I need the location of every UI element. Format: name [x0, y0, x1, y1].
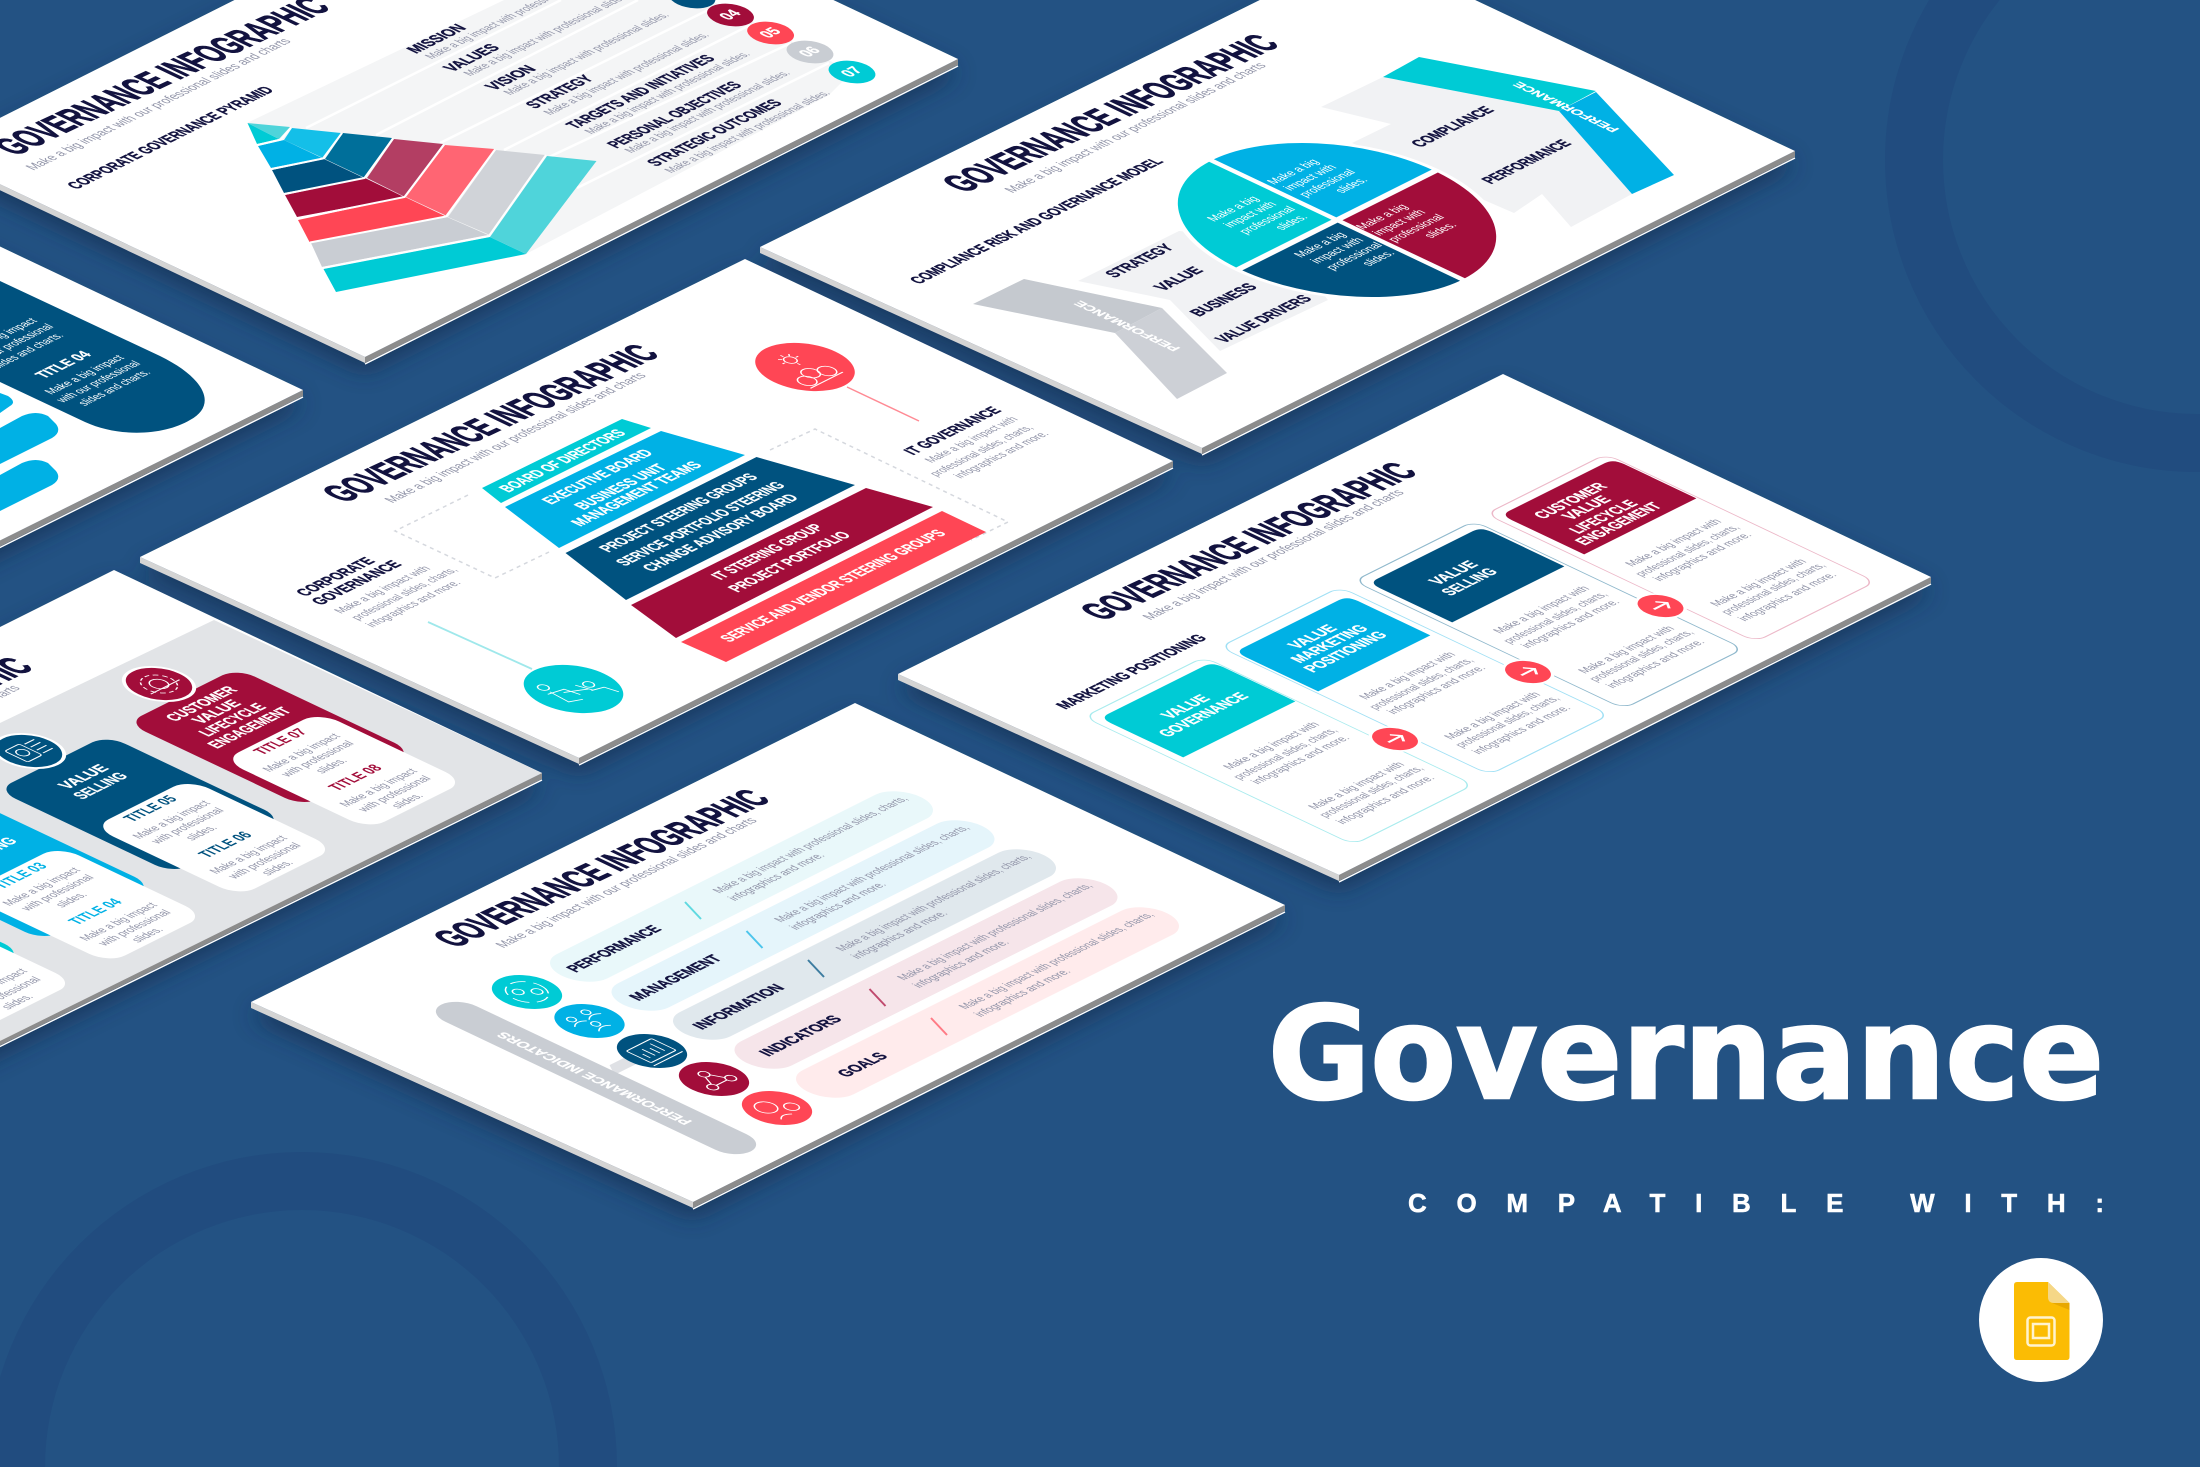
column: dark blue: Make a big impact	[130, 799, 214, 841]
icon: arrow one	[1358, 721, 1432, 757]
circle segment text: impact with	[1369, 207, 1429, 237]
text: IT governance: professional slides, charts,	[927, 424, 1037, 478]
icon: dark blue dashboard	[603, 1027, 701, 1075]
pyramid labels: MISSION	[403, 22, 471, 56]
row: management: infographics and more.	[787, 880, 890, 932]
slide subtitle: Make a big impact with our professional slides and charts	[21, 36, 295, 172]
card: value selling: SELLING	[1437, 566, 1503, 598]
slide title: GOVERNANCE INFOGRAPHIC	[1069, 457, 1427, 625]
icon: blue team	[540, 997, 639, 1045]
chart: layered pyramid	[248, 123, 596, 292]
label stripes background	[247, 0, 852, 254]
icon: arrow two	[1491, 654, 1565, 690]
pyramid labels: Make a big impact with professional slides.	[582, 50, 754, 136]
pyramid labels: VALUES	[439, 42, 505, 74]
card: value governance: infographics and more.	[1334, 774, 1438, 826]
column: teal: slides.	[0, 993, 37, 1011]
text: corporate governance	[292, 555, 464, 629]
column: crimson: Make a big impact	[337, 767, 421, 809]
card: value governance: infographics and more.	[1249, 734, 1353, 786]
column: dark blue: TITLE 06	[195, 830, 257, 860]
icon: arrow three	[1624, 588, 1697, 624]
circle segment text: slides.	[1271, 212, 1311, 232]
pyramid labels: PERSONAL OBJECTIVES	[603, 79, 747, 151]
card: value marketing positioning: MARKETING	[1287, 623, 1373, 665]
column: dark blue: with professional	[225, 841, 304, 881]
pyramid labels	[403, 0, 834, 175]
row: information: Make a big impact with professional slides, charts,	[833, 853, 1035, 953]
row: goals: GOALS	[833, 1050, 893, 1080]
card: value governance: VALUE	[1157, 693, 1215, 721]
numbered circles: 05	[755, 25, 786, 40]
column: crimson: Make a big impact	[260, 732, 344, 774]
card: value marketing positioning: professional slides, charts,	[1367, 657, 1477, 711]
text: corporate governance: Make a big impact with	[332, 565, 434, 615]
column: crimson: VALUE	[188, 698, 246, 726]
slide title: GOVERNANCE INFOGRAPHIC	[422, 784, 780, 952]
card: value governance: Make a big impact with	[1221, 721, 1323, 771]
chart: stepped pyramid: MANAGEMENT TEAMS	[567, 459, 707, 529]
row: performance	[537, 785, 946, 988]
section heading: CORPORATE GOVERNANCE PYRAMID	[63, 84, 279, 192]
card: customer value lifecycle engagement: CUSTOMER	[1530, 481, 1612, 521]
card: value governance	[1084, 657, 1474, 845]
card: customer value lifecycle engagement	[1486, 454, 1876, 642]
column: blue: TITLE 04	[65, 896, 127, 927]
labels: BUSINESS	[1186, 281, 1262, 319]
column: crimson: with professional	[278, 739, 357, 779]
column: crimson: with professional	[355, 774, 434, 814]
chart: stepped pyramid: CHANGE ADVISORY BOARD	[639, 492, 803, 574]
circle segment text: slides.	[1331, 175, 1371, 195]
text: title 04: with our professional	[53, 360, 144, 405]
card: value governance: Make a big impact with	[1306, 761, 1408, 811]
circle segment text: impact with	[1280, 162, 1340, 192]
column: crimson: slides.	[313, 757, 351, 775]
chart: stepped pyramid: SERVICE AND VENDOR STEERING GROUPS	[716, 528, 951, 644]
card: value selling: VALUE	[1425, 559, 1483, 587]
card: value selling: infographics and more.	[1519, 598, 1623, 650]
numbered circles	[659, 0, 885, 88]
column: crimson: LIFECYCLE	[195, 701, 271, 739]
text: IT governance: Make a big impact with	[922, 415, 1022, 465]
column: crimson: CUSTOMER	[162, 684, 242, 724]
text: IT governance: IT GOVERNANCE	[900, 405, 1006, 457]
text: IT governance: infographics and more.	[952, 430, 1052, 480]
card: value marketing positioning: VALUE	[1284, 623, 1342, 651]
chevron: performance top right: PERFORMANCE	[1509, 80, 1622, 134]
pyramid labels: Make a big impact with professional slides.	[541, 31, 713, 117]
panel: marketing positioning slide	[898, 374, 1931, 882]
icon: google slides badge	[1979, 1258, 2103, 1382]
icon: IT governance idea	[735, 333, 919, 421]
column: dark blue	[0, 735, 335, 896]
numbered circles: 06	[795, 45, 825, 59]
column: blue: slides.	[53, 891, 91, 909]
chart: stepped pyramid: PROJECT PORTFOLIO	[724, 529, 856, 595]
panel: left slide with rounded title pills	[0, 185, 303, 695]
column: blue: Make a big impact	[0, 866, 84, 908]
icon: red people talk	[728, 1084, 826, 1132]
chart: stepped pyramid: SERVICE PORTFOLIO STEERING	[612, 480, 790, 568]
icon: corporate governance figures	[428, 622, 643, 723]
chevron: performance top right	[1383, 57, 1674, 194]
column: dark blue: with professional	[148, 806, 227, 846]
circle segment text	[1203, 153, 1463, 280]
card: value governance: professional slides, charts,	[1317, 765, 1427, 819]
panel: customer value columns slide	[0, 570, 542, 1075]
section heading: MARKETING POSITIONING	[1052, 632, 1212, 712]
text: compatible with: COMPATIBLE WITH:	[1408, 1188, 2104, 1218]
card: value marketing positioning: infographics and more.	[1385, 664, 1489, 716]
labels	[1101, 104, 1576, 345]
card: customer value lifecycle engagement: LIFECYCLE	[1565, 498, 1643, 536]
card: customer value lifecycle engagement: Make a big impact with	[1623, 518, 1725, 568]
row: information: infographics and more.	[849, 909, 951, 961]
card: value marketing positioning: infographics and more.	[1470, 704, 1574, 756]
numbered circles: 07	[837, 65, 867, 79]
text: corporate governance: professional slides, charts,	[349, 566, 461, 622]
slide subtitle: Make a big impact with our professional slides and charts	[380, 370, 650, 505]
card: value marketing positioning: Make a big impact with	[1442, 691, 1544, 741]
card: value governance: professional slides, charts,	[1231, 727, 1341, 781]
card: value marketing positioning: professional slides, charts,	[1453, 695, 1563, 749]
performance indicators bar: PERFORMANCE INDICATORS	[494, 1030, 696, 1126]
column: dark blue: slides.	[259, 859, 297, 877]
slide subtitle: Make a big impact with our professional slides and charts	[1000, 60, 1270, 195]
panel: performance indicators slide	[251, 703, 1285, 1209]
card: value selling: infographics and more.	[1604, 638, 1708, 690]
row: goals: infographics and more.	[972, 967, 1074, 1019]
row: management	[598, 814, 1008, 1017]
column: dark blue: Make a big impact	[207, 834, 291, 876]
card: value marketing positioning: POSITIONING	[1300, 629, 1392, 675]
numbered circles: 04	[715, 7, 746, 22]
slide title: GOVERNANCE INFOGRAPHIC	[311, 339, 669, 507]
row: performance: PERFORMANCE	[563, 923, 666, 975]
row: information: INFORMATION	[689, 982, 789, 1032]
panel: IT and corporate governance pyramid slide	[140, 259, 1173, 765]
row: management: MANAGEMENT	[625, 953, 727, 1003]
labels: VALUE	[1150, 265, 1208, 293]
card: value selling: Make a big impact with	[1576, 625, 1678, 675]
column: dark blue: TITLE 05	[120, 794, 182, 824]
circle segment text: professional	[1295, 167, 1359, 199]
card: value selling: professional slides, charts,	[1587, 629, 1697, 683]
circle segment text: slides.	[1358, 248, 1398, 268]
slide subtitle: Make a big impact with our professional slides and charts	[491, 815, 761, 950]
section heading: COMPLIANCE RISK AND GOVERNANCE MODEL	[906, 156, 1168, 286]
column: crimson	[127, 668, 465, 829]
card: customer value lifecycle engagement: infographics and more.	[1651, 531, 1755, 583]
row: indicators: INDICATORS	[755, 1013, 847, 1059]
card: customer value lifecycle engagement: Make a big impact with	[1708, 558, 1810, 608]
circle segment text: impact with	[1220, 199, 1280, 229]
text: title 04: Make a big impact	[42, 354, 128, 396]
column: crimson: ENGAGEMENT	[204, 705, 296, 751]
circle segment text: slides.	[1420, 220, 1460, 240]
column: crimson: slides.	[389, 792, 427, 810]
circle segment text: Make a big	[1352, 202, 1412, 231]
chart: segmented circle	[1105, 108, 1569, 332]
card: value marketing positioning	[1220, 587, 1610, 775]
text: title 04	[0, 317, 154, 408]
column: blue: with professional	[18, 873, 97, 913]
labels: PERFORMANCE	[1478, 138, 1576, 186]
text: corporate governance: CORPORATE	[292, 555, 380, 599]
column: dark blue: SELLING	[69, 770, 133, 802]
pyramid labels: TARGETS AND INITIATIVES	[562, 53, 720, 131]
text: corporate governance: infographics and more.	[364, 579, 464, 629]
labels: COMPLIANCE	[1407, 104, 1499, 150]
column: dark blue: slides.	[183, 824, 221, 842]
pyramid labels: Make a big impact with professional slides.	[622, 69, 794, 155]
circle segment text: impact with	[1307, 235, 1367, 265]
pyramid labels: Make a big impact with professional slides.	[501, 11, 673, 97]
column: blue: slides.	[129, 926, 167, 944]
card: value selling: professional slides, charts,	[1501, 591, 1611, 645]
light arrow backgrounds	[1078, 77, 1632, 351]
text: title 04: slides and charts.	[76, 368, 154, 408]
chart: stepped pyramid: BUSINESS UNIT	[570, 462, 672, 512]
circle segment text: Make a big	[1263, 157, 1323, 186]
circle segment text: professional	[1322, 240, 1386, 272]
card: value governance: GOVERNANCE	[1155, 691, 1253, 739]
row: indicators: infographics and more.	[910, 938, 1013, 990]
labels: STRATEGY	[1101, 242, 1179, 280]
row: management: Make a big impact with professional slides, charts,	[772, 824, 973, 924]
dark blue rounded block	[0, 281, 205, 433]
text: title 04: TITLE 04	[32, 349, 97, 381]
column: crimson: TITLE 07	[250, 727, 312, 757]
icon: crimson gear badge	[110, 660, 208, 708]
card: value marketing positioning: Make a big impact with	[1357, 651, 1459, 701]
chart: stepped pyramid: EXECUTIVE BOARD	[538, 447, 658, 507]
pyramid labels: STRATEGY	[522, 73, 598, 111]
circle segment text: Make a big	[1290, 230, 1350, 259]
pyramid labels: VISION	[481, 63, 541, 93]
card: customer value lifecycle engagement: infographics and more.	[1736, 571, 1840, 623]
row: goals: Make a big impact with professional slides, charts,	[956, 911, 1158, 1011]
row: indicators: Make a big impact with professional slides, charts,	[895, 882, 1096, 982]
card: customer value lifecycle engagement: professional slides, charts,	[1633, 524, 1743, 578]
panel: compliance risk and governance model slide	[760, 0, 1795, 455]
dashed connectors	[395, 429, 1008, 578]
row: indicators	[721, 872, 1131, 1075]
icon: dark blue report badge	[0, 727, 78, 775]
icon: teal cycle	[478, 968, 576, 1016]
heading: Governance: Governance	[1268, 980, 2104, 1129]
blue pills	[0, 393, 58, 511]
card: value selling: Make a big impact with	[1491, 585, 1593, 635]
column: blue: with professional	[95, 908, 174, 948]
card: value selling	[1354, 521, 1744, 709]
column: crimson: TITLE 08	[325, 763, 387, 793]
column: teal	[0, 869, 75, 1030]
chart: stepped pyramid: BOARD OF DIRECTORS	[495, 427, 631, 495]
card: customer value lifecycle engagement: professional slides, charts,	[1719, 562, 1829, 616]
slide subtitle: Make a big impact with our professional slides and charts	[1138, 487, 1408, 622]
performance indicators bar	[426, 997, 766, 1159]
column: blue	[0, 802, 205, 963]
icon: crimson network	[665, 1055, 763, 1103]
pyramid labels: STRATEGIC OUTCOMES	[643, 97, 787, 169]
chart: stepped pyramid: PROJECT STEERING GROUPS	[595, 471, 763, 555]
chevron: performance bottom left: PERFORMANCE	[1070, 299, 1183, 353]
circle segment text: Make a big	[1203, 194, 1263, 223]
row: performance: Make a big impact with professional slides, charts,	[710, 795, 912, 895]
chart: stepped pyramid: IT STEERING GROUP	[708, 522, 828, 582]
row: performance: infographics and more.	[726, 851, 828, 903]
circle segment text: professional	[1384, 212, 1448, 244]
row: information	[660, 843, 1069, 1046]
column: dark blue: VALUE	[54, 762, 114, 792]
text: corporate governance: GOVERNANCE	[308, 559, 406, 607]
chevron: performance bottom left	[973, 279, 1227, 399]
pyramid labels: Make a big impact with professional slides.	[662, 89, 834, 175]
circle segment text: professional	[1235, 204, 1299, 236]
labels: VALUE DRIVERS	[1211, 293, 1317, 345]
card: customer value lifecycle engagement: ENGAGEMENT	[1571, 500, 1667, 548]
column: blue: Make a big impact	[77, 901, 161, 943]
chart: stepped pyramid	[482, 419, 986, 662]
panel: corporate governance pyramid slide	[0, 0, 958, 364]
row: goals	[783, 901, 1192, 1104]
card: customer value lifecycle engagement: VALUE	[1558, 494, 1616, 522]
text: IT governance	[900, 405, 1052, 480]
